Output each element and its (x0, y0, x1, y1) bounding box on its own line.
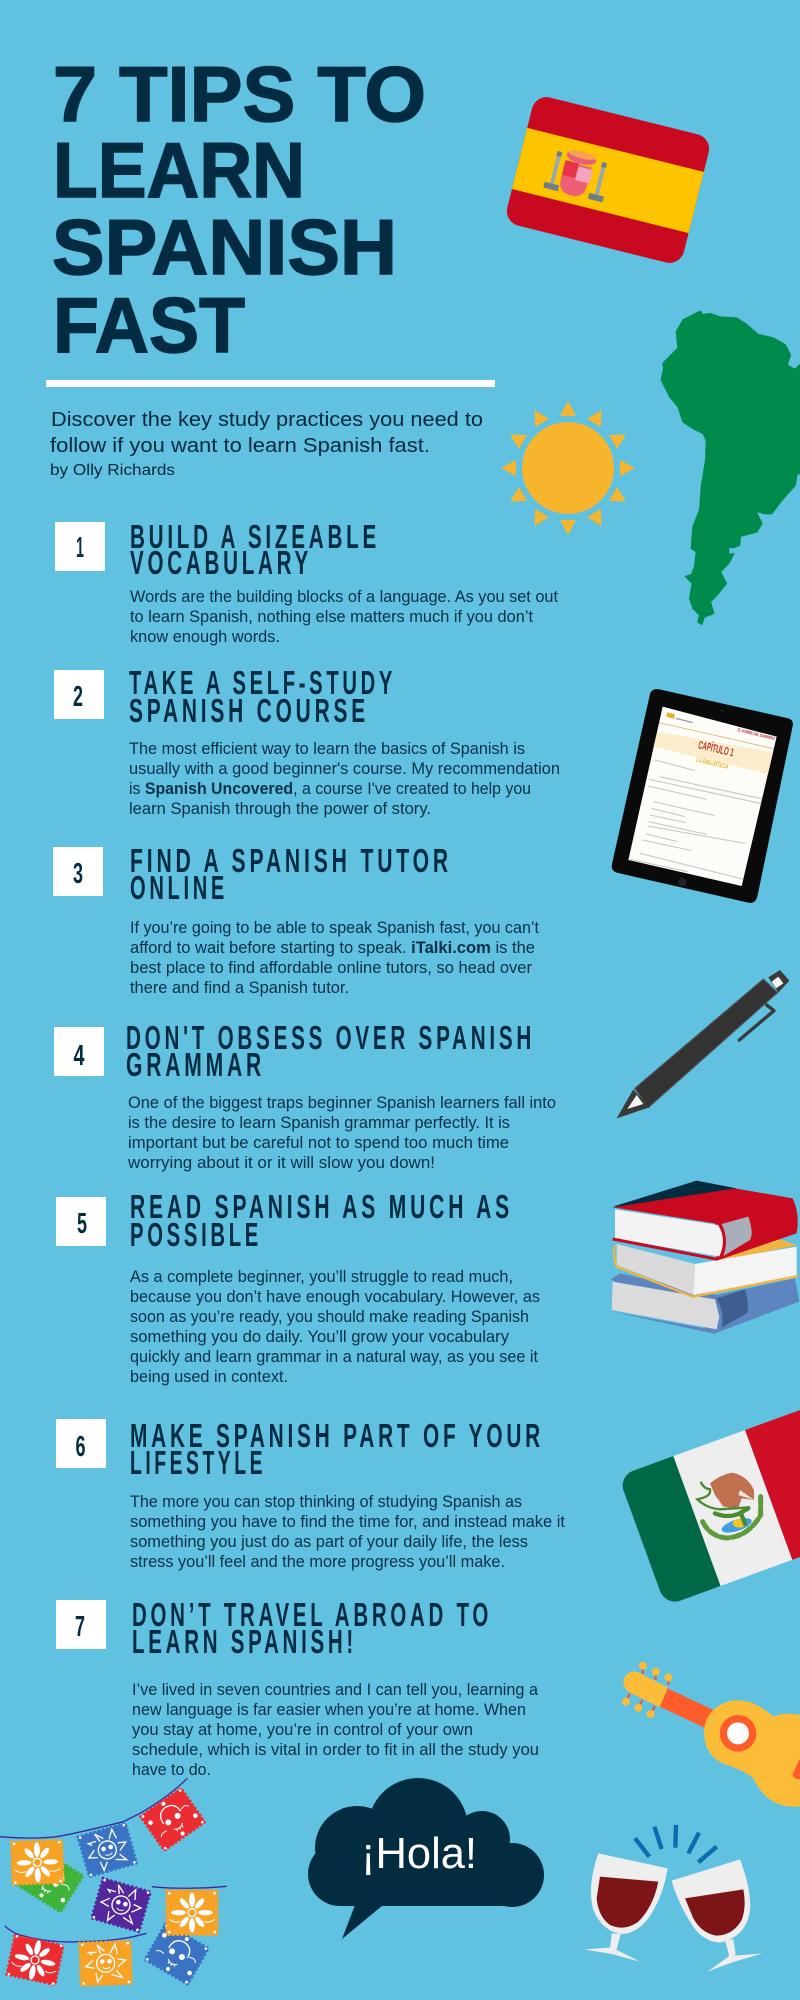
body text 5: something you do daily. You’ll grow your vocabulary (130, 1328, 510, 1346)
heading 7 (132, 1596, 492, 1660)
icon: tablet: EL HOMBRE DEL SOMBRERO (737, 727, 776, 741)
orange sun flag (80, 1941, 132, 1986)
icon: sun (501, 401, 635, 535)
body text 6 (130, 1493, 565, 1571)
heading 6 (130, 1417, 544, 1481)
number box 3 (53, 847, 103, 896)
heading 1 (130, 518, 380, 581)
title: FAST (53, 281, 245, 369)
number box 1: 1 (76, 532, 84, 564)
title: 7 TIPS TO (53, 50, 426, 138)
cheers rays (635, 1825, 717, 1862)
number box 3: 3 (73, 858, 83, 890)
icon: papel picado bunting (0, 1778, 227, 1986)
body text 3: If you’re going to be able to speak Spanish fast, you can’t (130, 919, 539, 937)
bottom book (610, 1273, 799, 1334)
number box 6: 6 (76, 1431, 86, 1463)
body text 5: soon as you’re ready, you should make reading Spanish (130, 1308, 529, 1326)
heading 2: SPANISH COURSE (129, 692, 369, 729)
tip 4 (54, 1019, 556, 1172)
icon: south america map (662, 312, 800, 624)
number box 2: 2 (73, 681, 83, 713)
body text 3 (130, 919, 539, 997)
body text 2: is Spanish Uncovered, a course I've created to help you (129, 780, 531, 798)
heading 5: POSSIBLE (130, 1216, 262, 1253)
orange flag right (167, 1891, 217, 1935)
body text 1: know enough words. (130, 628, 280, 646)
heading 5 (130, 1188, 513, 1253)
purple flag (92, 1878, 150, 1932)
body text 5: because you don’t have enough vocabulary. However, as (130, 1288, 540, 1306)
number box 5 (56, 1197, 106, 1246)
tip 1 (55, 518, 558, 646)
number box 7 (56, 1600, 106, 1649)
number box 2 (54, 670, 104, 719)
hola text: ¡Hola! (361, 1829, 477, 1878)
body text 7 (132, 1681, 539, 1779)
blue flag (78, 1823, 137, 1877)
body text 7: you stay at home, you’re in control of your own (132, 1721, 473, 1739)
body text 5: As a complete beginner, you’ll struggle to read much, (130, 1268, 513, 1286)
body text 2: The most efficient way to learn the basics of Spanish is (129, 740, 525, 758)
heading 3: FIND A SPANISH TUTOR (130, 842, 452, 879)
flag emblem (697, 1473, 761, 1538)
body text 5 (130, 1268, 540, 1386)
number box 4: 4 (74, 1040, 84, 1072)
body text 4: important but be careful not to spend too much time (128, 1134, 509, 1152)
title: LEARN (53, 126, 305, 214)
heading 6: MAKE SPANISH PART OF YOUR (130, 1417, 544, 1454)
body text 1 (130, 588, 558, 646)
heading 4: GRAMMAR (126, 1046, 265, 1083)
heading 4 (126, 1019, 535, 1083)
heading 1: BUILD A SIZEABLE (130, 518, 380, 555)
heading 2: TAKE A SELF-STUDY (129, 664, 396, 701)
intro text (50, 409, 483, 479)
body text 4: is the desire to learn Spanish grammar perfectly. It is (128, 1114, 510, 1132)
tip 6 (56, 1417, 565, 1571)
icon: mexican flag (622, 1410, 800, 1602)
body text 3: afford to wait before starting to speak. iTalki.com is the (130, 939, 535, 957)
body text 7: schedule, which is vital in order to fit in all the study you (132, 1741, 539, 1759)
middle book (614, 1238, 798, 1297)
heading 3: ONLINE (130, 869, 228, 906)
blue skull flag (145, 1924, 208, 1984)
body text 2: learn Spanish through the power of story. (129, 800, 431, 818)
tip 5 (56, 1188, 540, 1386)
tip 2 (54, 664, 560, 818)
title (52, 50, 426, 369)
body text 6: stress you’ll feel and the more progress you’ll make. (130, 1553, 505, 1571)
heading 1: VOCABULARY (130, 544, 312, 581)
heading 7: LEARN SPANISH! (132, 1623, 357, 1660)
number box 7: 7 (75, 1611, 85, 1643)
body text 1: Words are the building blocks of a language. As you set out (130, 588, 558, 606)
heading 3 (130, 842, 452, 906)
orange flag top left (11, 1840, 63, 1885)
icon: tablet: LA BIBLIOTECA (696, 757, 729, 771)
left glass (584, 1853, 668, 1962)
tip 3 (53, 842, 539, 997)
heading 4: DON'T OBSESS OVER SPANISH (126, 1019, 535, 1056)
icon: stack of books (610, 1181, 799, 1334)
icon: tablet: CAPÍTULO 1 (697, 739, 735, 759)
body text 5: being used in context. (130, 1368, 288, 1386)
body text 4: worrying about it or it will slow you down! (127, 1154, 435, 1172)
body text 7: new language is far easier when you’re at home. When (132, 1701, 526, 1719)
red flower flag (7, 1935, 63, 1985)
number box 4 (54, 1027, 104, 1076)
number box 1 (55, 522, 105, 571)
tip 7 (56, 1596, 539, 1779)
body text 5: quickly and learn grammar in a natural way, as you see it (130, 1348, 538, 1366)
right glass (672, 1859, 763, 1972)
intro text: follow if you want to learn Spanish fast. (50, 435, 430, 457)
green flag (18, 1849, 83, 1912)
top book (613, 1181, 798, 1261)
intro text: Discover the key study practices you need to (51, 409, 483, 431)
body text 1: to learn Spanish, nothing else matters much if you don’t (130, 608, 533, 626)
icon: tablet (612, 689, 793, 903)
body text 6: something you have to find the time for, and instead make it (130, 1513, 565, 1531)
icon: wine glasses (584, 1825, 763, 1972)
heading 5: READ SPANISH AS MUCH AS (130, 1188, 513, 1225)
body text 7: I’ve lived in seven countries and I can tell you, learning a (132, 1681, 539, 1699)
icon: guitar (622, 1662, 800, 1807)
body text 6: The more you can stop thinking of studying Spanish as (130, 1493, 522, 1511)
body text 3: there and find a Spanish tutor. (130, 979, 349, 997)
title underline (46, 380, 495, 387)
icon: speech bubble (308, 1778, 544, 1939)
title: SPANISH (52, 203, 397, 291)
body text 3: best place to find affordable online tutors, so head over (130, 959, 532, 977)
body text 2: usually with a good beginner's course. My recommendation (129, 760, 560, 778)
number box 6 (56, 1419, 106, 1468)
intro text: by Olly Richards (50, 462, 175, 479)
body text 7: have to do. (132, 1761, 211, 1779)
body text 4: One of the biggest traps beginner Spanish learners fall into (128, 1094, 556, 1112)
body text 4 (127, 1094, 556, 1172)
icon: pen (617, 970, 789, 1118)
body text 2 (129, 740, 560, 818)
red skull flag (141, 1788, 205, 1850)
number box 5: 5 (77, 1208, 87, 1240)
heading 2 (129, 664, 396, 729)
heading 7: DON’T TRAVEL ABROAD TO (132, 1596, 492, 1633)
body text 6: something you just do as part of your daily life, the less (130, 1533, 528, 1551)
icon: spanish flag (504, 94, 712, 266)
heading 6: LIFESTYLE (130, 1444, 266, 1481)
